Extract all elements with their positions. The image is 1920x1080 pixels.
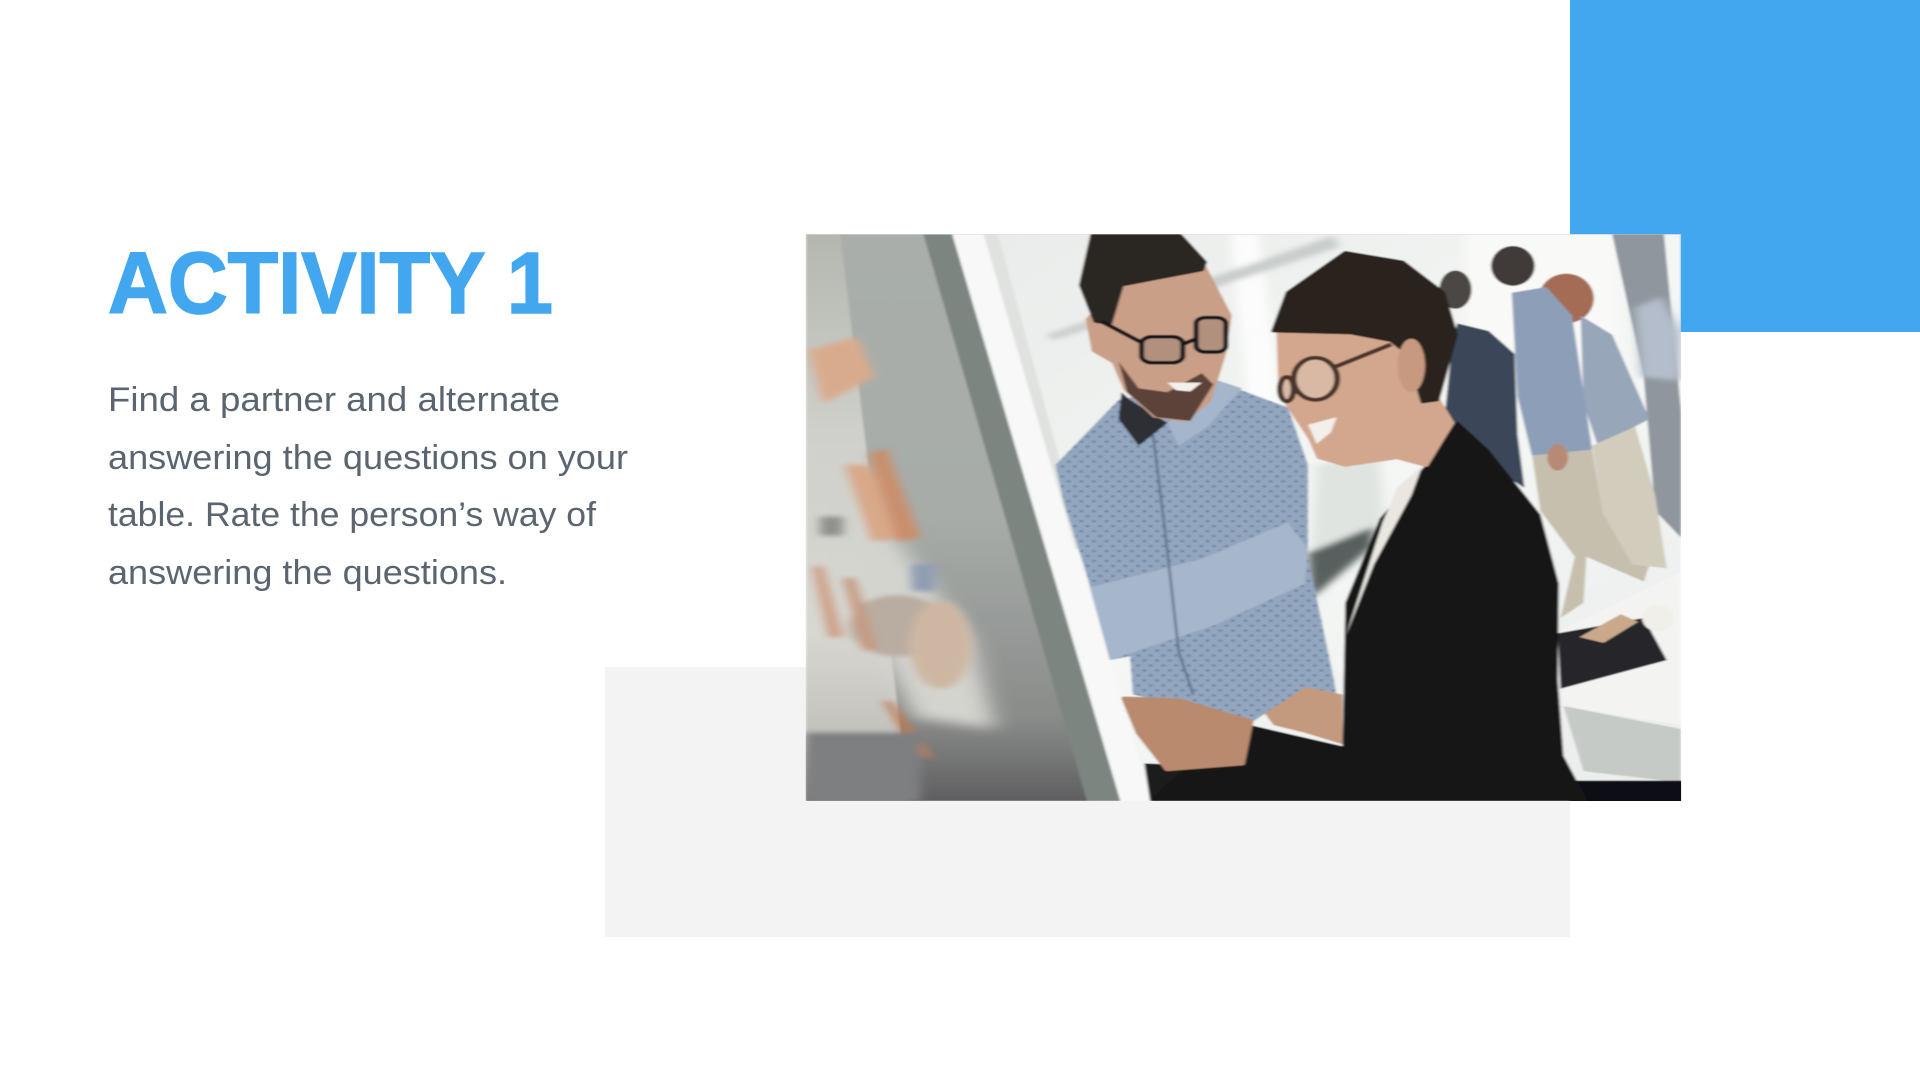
body line 4: answering the questions. xyxy=(108,554,507,592)
photo: two colleagues at a glass board xyxy=(806,234,1684,804)
table front xyxy=(1563,706,1681,783)
woman: smile xyxy=(1308,417,1337,444)
grey backdrop block xyxy=(605,667,1570,937)
woman: jacket xyxy=(1150,421,1588,801)
man: hair xyxy=(1081,234,1205,323)
man: raised sleeve xyxy=(1090,522,1308,660)
background colleague in dark suit xyxy=(1439,271,1524,488)
window columns xyxy=(1047,234,1615,599)
man: neck and face xyxy=(1090,266,1228,419)
man: shirt xyxy=(1055,381,1342,733)
man: collar xyxy=(1119,392,1167,446)
woman: rear hand xyxy=(1265,687,1342,744)
glass board: far pane xyxy=(806,234,912,801)
body text xyxy=(108,381,628,592)
glass board: dark frame edge xyxy=(923,234,1124,801)
glass board: mid pane xyxy=(840,234,1090,801)
woman: hair xyxy=(1274,253,1456,402)
body line 2: answering the questions on your xyxy=(108,439,628,477)
table top xyxy=(1662,710,1678,724)
glass board: reflections and sticky notes xyxy=(806,337,972,802)
background colleague in blue shirt xyxy=(1491,246,1592,471)
woman: neck and face xyxy=(1279,331,1451,465)
man: beard xyxy=(1119,362,1213,421)
woman: blouse xyxy=(1345,465,1423,637)
body line 3: table. Rate the person’s way of xyxy=(108,496,597,534)
photo hairline xyxy=(806,233,1681,236)
figure in blue at right edge xyxy=(1635,297,1681,381)
man: smile xyxy=(1167,383,1202,391)
background colleague: woman xyxy=(1539,274,1667,568)
background colleague: trousers xyxy=(1532,450,1650,618)
woman: ear xyxy=(1398,339,1425,392)
woman xyxy=(1124,253,1588,801)
title: ACTIVITY 1 xyxy=(108,235,553,332)
man xyxy=(1055,234,1342,801)
woman: glasses xyxy=(1280,344,1391,401)
man: shirt placket xyxy=(1153,434,1193,695)
body line 1: Find a partner and alternate xyxy=(108,381,560,419)
woman: front hand xyxy=(1124,698,1251,769)
black folder on table xyxy=(1558,605,1674,689)
office background xyxy=(998,234,1682,790)
right pillar xyxy=(1612,234,1681,538)
glass board: white edge xyxy=(950,234,1126,801)
man: trousers xyxy=(1142,762,1188,801)
man: glasses xyxy=(1101,318,1226,363)
blue corner block xyxy=(1570,0,1920,332)
